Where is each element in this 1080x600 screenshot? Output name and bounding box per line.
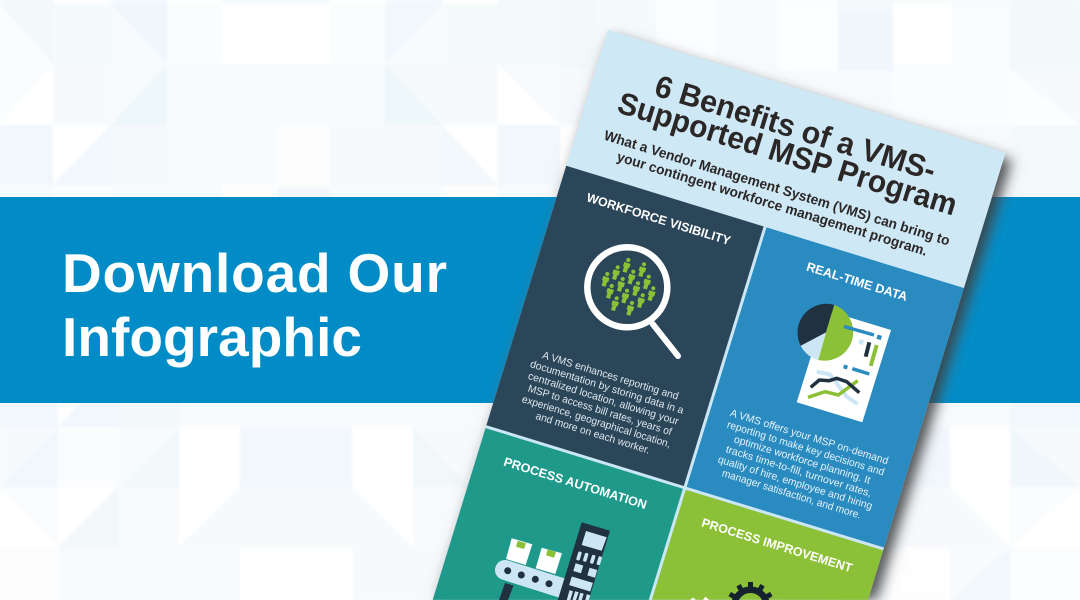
blue band: [0, 197, 1080, 403]
title: Supported MSP Program: [614, 85, 961, 222]
icon: report with pie chart: [797, 304, 891, 422]
icon: gear: [690, 582, 771, 600]
subtitle: your contingent workforce management program.: [615, 148, 929, 259]
subtitle: What a Vendor Management System (VMS) can bring to: [602, 127, 952, 248]
panel: title header: [566, 30, 1006, 288]
panel: process improvement: [652, 490, 883, 600]
icon: factory conveyor: [499, 522, 610, 600]
text: real-time data description: quality of hire, employee and hiring: [716, 454, 874, 512]
title: 6 Benefits of a VMS-: [651, 68, 940, 188]
heading: process automation: PROCESS AUTOMATION: [502, 455, 648, 512]
headline: Infographic: [62, 306, 362, 368]
panel: workforce visibility: [486, 166, 764, 486]
panel: real-time data: [687, 227, 964, 548]
headline: [62, 242, 447, 368]
text: real-time data description: tracks time-to-fill, turnover rates,: [724, 443, 873, 500]
text: real-time data description: reporting to make key decisions and: [726, 419, 886, 479]
headline: Download Our: [62, 242, 447, 304]
text: workforce visibility description: [514, 347, 689, 463]
heading: real-time data: REAL-TIME DATA: [805, 260, 909, 304]
text: workforce visibility description: documentation by storing data in a: [529, 358, 685, 417]
text: real-time data description: [711, 407, 890, 525]
infographic sheet preview: [433, 30, 1013, 600]
text: workforce visibility description: MSP to access bill rates, years of: [526, 383, 673, 438]
heading: process improvement: PROCESS IMPROVEMENT: [700, 516, 854, 575]
text: real-time data description: manager satisfaction, and more.: [720, 467, 863, 522]
text: workforce visibility description: experience, geographical location,: [520, 393, 672, 450]
text: real-time data description: optimize workforce planning. It: [732, 433, 872, 487]
heading: workforce visibility: WORKFORCE VISIBILITY: [585, 190, 733, 248]
icon: magnifier over workforce: [587, 247, 678, 356]
text: real-time data description: A VMS offers your MSP on-demand: [729, 407, 890, 467]
text: workforce visibility description: A VMS enhances reporting and: [541, 349, 680, 403]
text: workforce visibility description: and more on each worker.: [534, 410, 651, 457]
panel: process automation: [433, 428, 683, 600]
text: workforce visibility description: centralized location, allowing your: [527, 370, 681, 428]
